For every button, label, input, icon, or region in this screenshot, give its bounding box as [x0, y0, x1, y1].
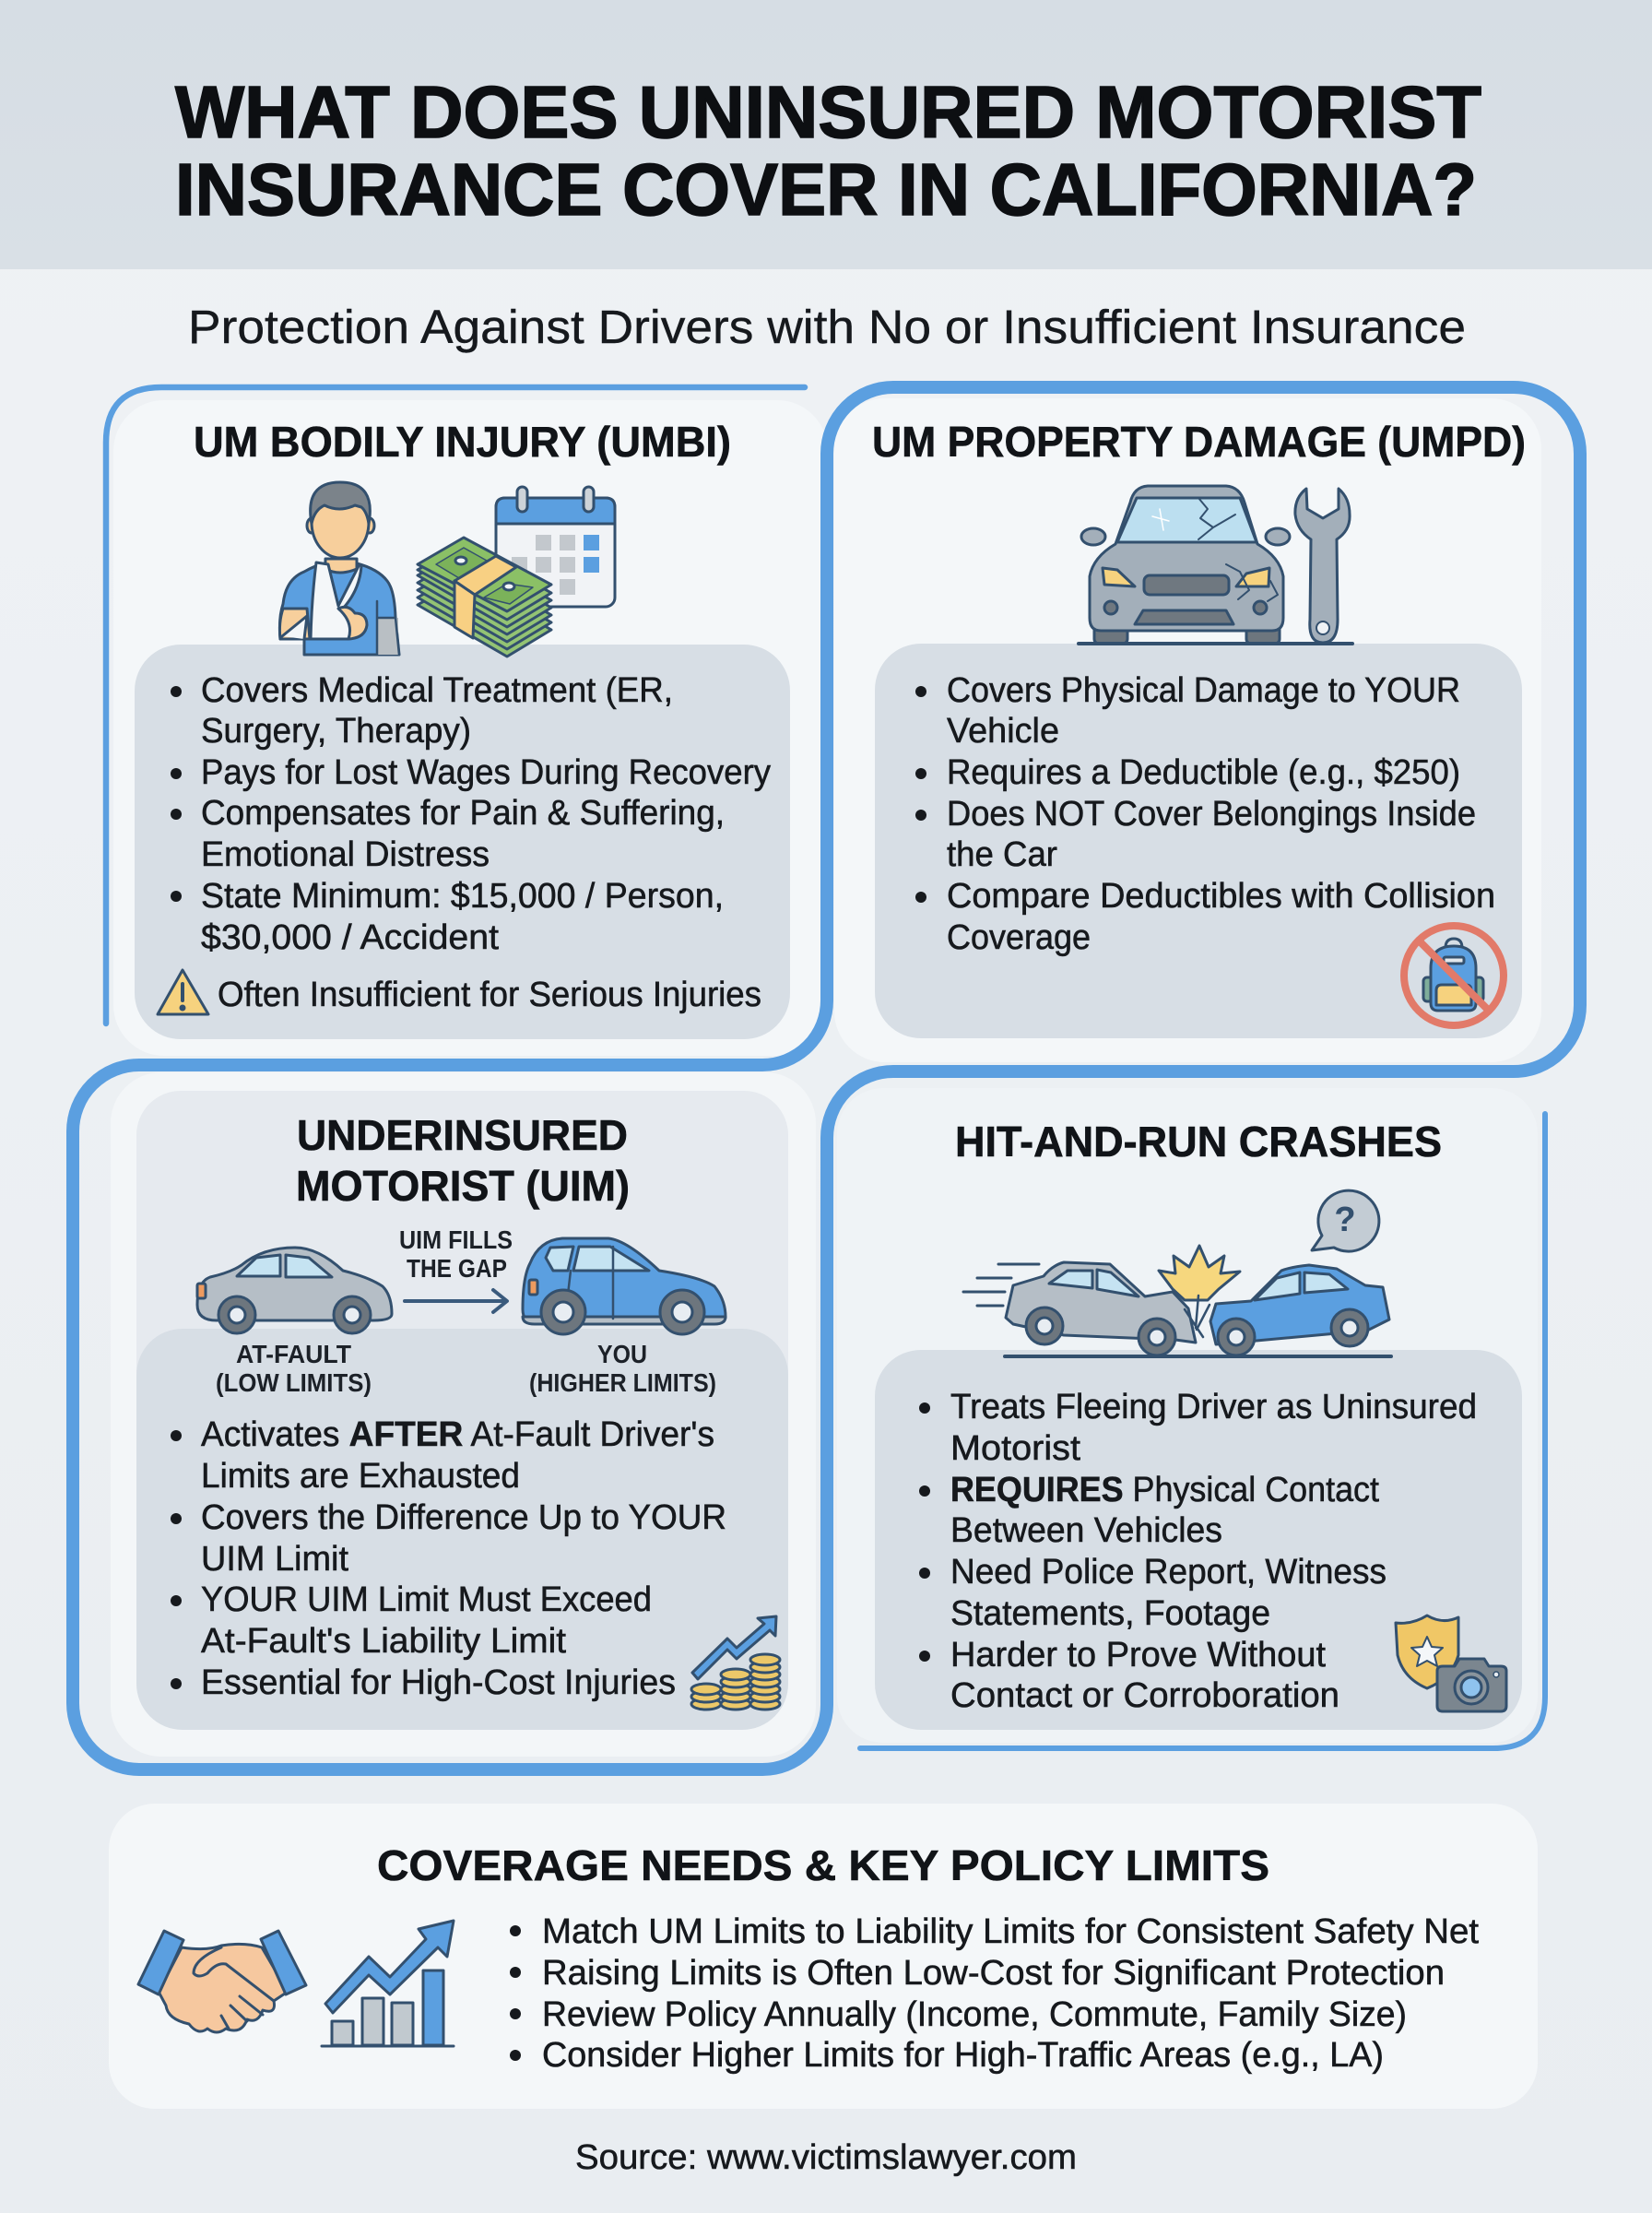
label: you higher limits [529, 1340, 716, 1397]
icon: question speech bubble: ? [1334, 1201, 1356, 1239]
bullet list: Match UM Limits to Liability Limits for Consistent Safety Net [542, 1912, 1479, 1951]
label: at-fault low limits: (LOW LIMITS) [216, 1368, 372, 1397]
heading: coverage needs: COVERAGE NEEDS & KEY POLICY LIMITS [377, 1841, 1269, 1889]
icon: question speech bubble [1312, 1190, 1379, 1251]
bullet list: UIM Limit [201, 1540, 348, 1579]
bullet list: Limits are Exhausted [201, 1457, 520, 1496]
bullet list: Covers Medical Treatment (ER, [201, 671, 673, 710]
heading: UIM: UNDERINSURED [297, 1111, 628, 1159]
bullet list: Covers Physical Damage to YOUR [947, 671, 1460, 710]
panel: coverage needs and key policy limits [109, 1804, 1538, 2109]
label: you higher limits: (HIGHER LIMITS) [529, 1368, 716, 1397]
bullet list: Essential for High-Cost Injuries [201, 1663, 676, 1702]
heading: hit-and-run: HIT-AND-RUN CRASHES [955, 1118, 1442, 1166]
icon: at-fault gray car [197, 1248, 392, 1333]
bullet list: Coverage [947, 918, 1091, 957]
label: you higher limits: YOU [597, 1340, 647, 1368]
panel backgrounds [111, 398, 1541, 1757]
bullet list [171, 1415, 726, 1702]
icon: warning triangle [158, 970, 208, 1014]
bullet list: Requires a Deductible (e.g., $250) [947, 753, 1460, 792]
header band with title: WHAT DOES UNINSURED MOTORIST [175, 71, 1481, 153]
bullet list: the Car [947, 835, 1057, 874]
bullet box [875, 644, 1522, 1038]
label: UIM fills the gap: UIM FILLS [399, 1225, 513, 1254]
icon: collision of two cars [963, 1246, 1391, 1356]
panel: UM property damage [872, 418, 1526, 1038]
bullet list: Vehicle [947, 712, 1059, 751]
bullet list: At-Fault's Liability Limit [201, 1622, 566, 1661]
icon: stack of cash [418, 538, 551, 657]
bullet list: State Minimum: $15,000 / Person, [201, 877, 724, 916]
bullet list: Consider Higher Limits for High-Traffic Areas (e.g., LA) [542, 2036, 1384, 2075]
icon: no belongings backpack [1404, 926, 1504, 1025]
icon: your blue car [523, 1238, 726, 1334]
icon: handshake [138, 1931, 306, 2032]
heading: UIM [296, 1111, 630, 1210]
bullet list [919, 1388, 1477, 1715]
icon: police badge [1396, 1615, 1458, 1688]
subtitle: Protection Against Drivers with No or Insufficient Insurance [188, 301, 1466, 353]
bullet list: YOUR UIM Limit Must Exceed [201, 1580, 652, 1619]
bullet list: Statements, Footage [950, 1594, 1270, 1633]
heading: UMBI: UM BODILY INJURY (UMBI) [194, 418, 731, 466]
header band with title: INSURANCE COVER IN CALIFORNIA? [175, 148, 1477, 231]
header band with title [0, 0, 1652, 269]
bullet list: Between Vehicles [950, 1511, 1222, 1550]
bullet box [136, 1329, 788, 1730]
bullet list: Motorist [950, 1429, 1080, 1468]
bullet list [915, 671, 1495, 957]
bullet list: Compare Deductibles with Collision [947, 877, 1495, 916]
icon: camera [1437, 1659, 1506, 1711]
bullet list: Contact or Corroboration [950, 1676, 1339, 1715]
panel: underinsured motorist [136, 1111, 788, 1730]
bullet list: Does NOT Cover Belongings Inside [947, 795, 1476, 834]
bullet list: Review Policy Annually (Income, Commute, Family Size) [542, 1995, 1407, 2034]
bullet box [135, 645, 790, 1039]
frame: thin outline of UMBI panel [106, 387, 805, 1024]
label: UIM fills the gap [399, 1225, 513, 1283]
label: at-fault low limits [216, 1340, 372, 1397]
callout: often insufficient: Often Insufficient for Serious Injuries [218, 976, 761, 1014]
bullet list: Surgery, Therapy) [201, 712, 471, 751]
frame: thin outline of hit-and-run panel [860, 1114, 1545, 1748]
panel: UM bodily injury [135, 418, 790, 1039]
bullet list: $30,000 / Accident [201, 918, 499, 957]
icon: rising arrow and coins [691, 1616, 780, 1710]
heading: UIM: MOTORIST (UIM) [296, 1162, 630, 1210]
heading: UMPD: UM PROPERTY DAMAGE (UMPD) [872, 418, 1526, 466]
bullet list: Pays for Lost Wages During Recovery [201, 753, 771, 792]
icon: injured person with sling [279, 482, 399, 655]
frame: connected outline around UMPD and UIM panels [73, 387, 1580, 1769]
bullet list [171, 671, 771, 957]
bullet list: Compensates for Pain & Suffering, [201, 794, 725, 833]
panel: hit-and-run crashes [875, 1118, 1522, 1730]
bullet list: REQUIRES Physical Contact [950, 1471, 1379, 1509]
bullet list: Activates AFTER At-Fault Driver's [201, 1415, 714, 1454]
icon: wrench [1295, 489, 1350, 643]
bullet list: Treats Fleeing Driver as Uninsured [950, 1388, 1477, 1426]
source line: Source: www.victimslawyer.com [575, 2138, 1077, 2177]
icon: bar chart with rising arrow [322, 1921, 454, 2046]
icon: calendar [496, 487, 615, 607]
bullet list: Harder to Prove Without [950, 1636, 1326, 1675]
bullet list [510, 1912, 1479, 2075]
bullet box [875, 1350, 1522, 1730]
bullet list: Raising Limits is Often Low-Cost for Significant Protection [542, 1954, 1445, 1993]
bullet list: Covers the Difference Up to YOUR [201, 1498, 726, 1537]
bullet list: Need Police Report, Witness [950, 1553, 1386, 1592]
bullet list: Emotional Distress [201, 835, 490, 874]
label: UIM fills the gap: THE GAP [407, 1254, 507, 1283]
icon: damaged car front [1079, 486, 1352, 644]
arrow: at-fault to you [405, 1290, 507, 1312]
label: at-fault low limits: AT-FAULT [236, 1340, 351, 1368]
